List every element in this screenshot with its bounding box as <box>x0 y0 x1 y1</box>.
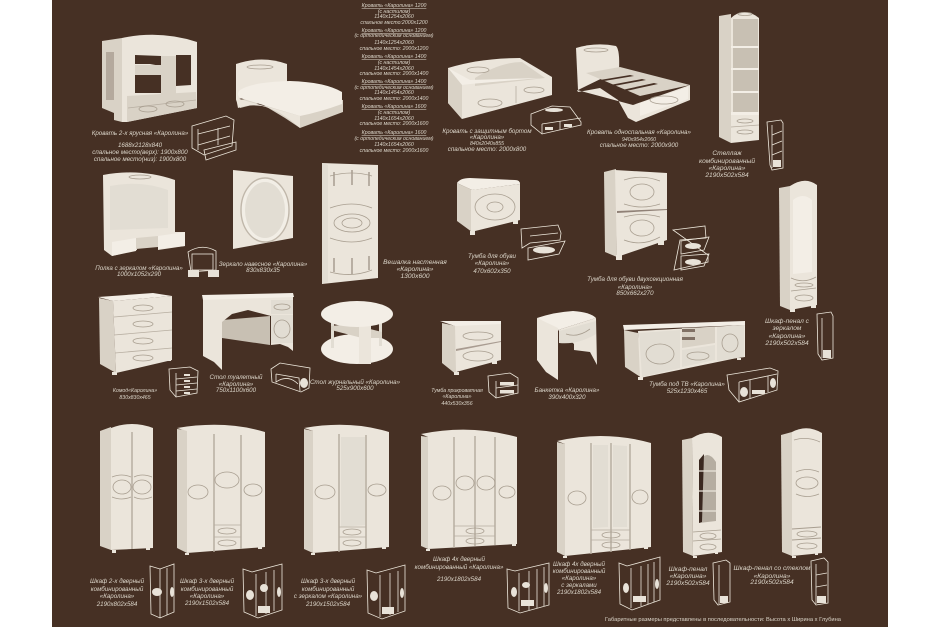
caption: TV cabinet: 525х1230х465 <box>667 388 708 395</box>
caption: bed sizes list: (с ортопедическим основанием) <box>354 136 434 142</box>
item: oval coffee table <box>321 301 393 364</box>
caption: dressing table: «Каролина» <box>219 381 254 388</box>
caption: shoe cabinet: «Каролина» <box>475 260 510 267</box>
caption: dressing table <box>210 374 263 394</box>
caption: bed sizes list: Кровать «Каролина» 1600 <box>362 104 426 110</box>
caption: bed sizes list: 1140х1454х2060 <box>374 90 414 96</box>
schematic: 3-door wardrobe with mirror <box>367 565 405 619</box>
caption: bunk bed: спальное место(низ): 1900х800 <box>94 156 187 163</box>
caption: bed sizes list: спальное место: 2000х1400 <box>360 71 428 77</box>
caption: TV cabinet <box>649 381 725 395</box>
item: TV cabinet <box>623 321 745 380</box>
caption: bed sizes list: спальное место:2000х1200 <box>360 20 428 26</box>
caption: bed sizes list: Кровать «Каролина» 1600 <box>362 130 426 136</box>
schematic: dressing table <box>271 363 310 392</box>
caption: bed sizes list: 1140х1654х2060 <box>374 142 414 148</box>
caption: bed sizes list: 1140х1254х2060 <box>374 40 414 46</box>
caption: tall wardrobe: 2190х502х584 <box>749 579 794 586</box>
item: single bed <box>576 44 690 122</box>
caption: bed sizes list: 1140х1454х2060 <box>374 66 414 72</box>
caption: 3-door wardrobe: Шкаф 3-х дверный <box>180 578 235 585</box>
item: 3-door wardrobe with mirror <box>304 425 389 555</box>
schematic: shelving unit <box>767 120 783 170</box>
caption: wardrobe with mirror <box>764 318 810 347</box>
item: shoe cabinet <box>457 178 520 235</box>
caption: sofa bed: 840х2040х855 <box>470 141 504 147</box>
caption: oval coffee table: Стол журнальный «Каролина» <box>310 379 401 386</box>
item: wall coat rack <box>322 163 378 284</box>
caption: single bed: 940х954х2060 <box>622 137 656 143</box>
caption: 4-door wardrobe with mirrors: Шкаф 4х дверный <box>553 561 606 568</box>
caption: round wall mirror: 830х830х35 <box>246 267 280 274</box>
caption: tall wardrobe <box>734 565 811 586</box>
caption: shelving unit: комбинированный <box>699 157 755 165</box>
schematic: sofa bed <box>531 106 581 134</box>
caption: glass display cabinet <box>665 566 710 587</box>
item: bunk bed <box>102 35 197 122</box>
schematic: bunk bed <box>192 116 236 160</box>
caption: 2-door wardrobe: 2190х802х584 <box>96 601 138 608</box>
caption: bed sizes list: 1140х1654х2060 <box>374 116 414 122</box>
item: wardrobe with mirror <box>779 181 817 312</box>
caption: chest of drawers <box>113 388 157 401</box>
caption: 2-door wardrobe: комбинированный <box>91 586 144 593</box>
item: double bed <box>236 60 343 128</box>
caption: 4-door wardrobe: Шкаф 4х дверный <box>433 556 486 563</box>
caption: bedside cabinet: «Каролина» <box>443 394 472 400</box>
caption: 3-door wardrobe: 2190х1502х584 <box>184 600 230 607</box>
caption: bunk bed: 1688х2128х840 <box>118 142 163 149</box>
caption: wardrobe with mirror: зеркалом <box>772 325 802 332</box>
schematic: glass display cabinet <box>713 560 730 605</box>
schematic: 3-door wardrobe <box>243 564 282 618</box>
caption: sofa bed: спальное место: 2000х800 <box>448 146 527 153</box>
item: sofa bed with guard <box>448 58 552 119</box>
caption: sofa bed: Кровать с защитным бортом <box>442 128 532 135</box>
caption: two-section shoe cabinet: 850х662х270 <box>616 290 654 297</box>
footnote: dimension order: Габаритные размеры представлены в последовательности: Высота х Ширина х Глубина <box>605 617 842 623</box>
caption: glass display cabinet: Шкаф-пенал <box>669 566 708 573</box>
caption: bunk bed: Кровать 2-х ярусная «Каролина» <box>92 130 189 137</box>
caption: 3-door wardrobe with mirror: Шкаф 3-х дверный <box>301 578 356 585</box>
item: tall wardrobe <box>781 428 822 558</box>
item: shelving unit <box>719 12 759 143</box>
caption: bed sizes list: (с настилом) <box>378 9 410 15</box>
caption: shoe cabinet <box>468 253 517 275</box>
schematic: chest of drawers <box>169 367 198 397</box>
schematic: 2-door wardrobe <box>150 564 174 618</box>
caption: bed sizes list: Кровать «Каролина» 1400 <box>362 79 426 85</box>
caption: dressing table: 750х1100х600 <box>216 387 257 394</box>
caption: bunk bed <box>92 130 189 163</box>
item: 4-door wardrobe with mirrors <box>557 436 651 558</box>
caption: 4-door wardrobe with mirrors: комбинированный <box>553 568 606 575</box>
caption: bed sizes list: Кровать «Каролина» 1200 <box>362 28 426 34</box>
schematic: 4-door wardrobe <box>507 563 549 613</box>
caption: bed sizes list: Кровать «Каролина» 1400 <box>362 54 426 60</box>
caption: shoe cabinet: 470х602х350 <box>473 268 511 275</box>
caption: 3-door wardrobe with mirror: 2190х1502х584 <box>305 601 351 608</box>
caption: bedside cabinet: Тумба прикроватная <box>431 388 483 394</box>
caption: wardrobe with mirror: «Каролина» <box>769 333 806 340</box>
caption: bed sizes list: Кровать «Каролина» 1200 <box>362 3 426 9</box>
caption: 3-door wardrobe <box>180 578 235 607</box>
item: dressing table <box>202 293 294 370</box>
caption: 3-door wardrobe: комбинированный <box>181 586 234 593</box>
caption: 4-door wardrobe: 2190х1802х584 <box>436 576 482 583</box>
caption: shoe cabinet: Тумба для обуви <box>468 253 517 260</box>
schematic: shelf with mirror <box>188 247 219 277</box>
caption: TV cabinet: Тумба под ТВ «Каролина» <box>649 381 725 388</box>
caption: shelf with mirror <box>95 265 183 278</box>
caption: tall wardrobe: «Каролина» <box>754 573 791 580</box>
item: two-section shoe cabinet <box>604 169 667 260</box>
caption: round wall mirror: Зеркало навесное «Каролина» <box>219 261 308 268</box>
caption: sofa bed <box>442 128 532 153</box>
caption: 3-door wardrobe: «Каролина» <box>190 593 225 600</box>
caption: 4-door wardrobe with mirrors: 2190х1802х584 <box>556 589 602 596</box>
caption: bed sizes list: 1140х1254х2060 <box>374 14 414 20</box>
caption: 4-door wardrobe with mirrors: «Каролина» <box>562 575 597 582</box>
schematic: shoe cabinet <box>521 225 565 260</box>
caption: bed sizes list: (с ортопедическим основанием) <box>354 33 434 39</box>
caption: bedside cabinet <box>431 388 483 407</box>
item: glass display cabinet <box>682 433 722 558</box>
item: round wall mirror <box>233 170 293 249</box>
caption: two-section shoe cabinet: «Каролина» <box>618 284 653 291</box>
caption: 4-door wardrobe with mirrors <box>553 561 606 596</box>
caption: bed sizes list <box>354 3 434 154</box>
item: shelf with mirror <box>103 172 185 256</box>
caption: bed sizes list: спальное место: 2000х1600 <box>360 148 428 154</box>
schematic: tall wardrobe <box>811 558 828 605</box>
caption: bed sizes list: спальное место: 2000х1600 <box>360 121 428 127</box>
caption: shelf with mirror: 1000х1052х290 <box>117 271 162 278</box>
caption: upholstered bench: 390х400х320 <box>548 394 586 401</box>
caption: oval coffee table <box>310 379 401 392</box>
caption: 4-door wardrobe: комбинированный «Каролина» <box>415 564 504 571</box>
caption: shelving unit: Стеллаж <box>712 150 742 157</box>
item: 4-door wardrobe <box>421 430 517 551</box>
caption: 4-door wardrobe with mirrors: с зеркалами <box>561 582 597 589</box>
item: 2-door wardrobe <box>100 424 153 553</box>
caption: shelving unit: 2190х502х584 <box>704 172 749 179</box>
caption: chest of drawers: Комод«Каролина» <box>113 388 157 394</box>
caption: bed sizes list: (с настилом) <box>378 60 410 66</box>
caption: wardrobe with mirror: Шкаф-пенал с <box>765 318 810 325</box>
schematic: 4-door wardrobe with mirrors <box>619 557 660 610</box>
caption: wardrobe with mirror: 2190х502х584 <box>764 340 809 347</box>
caption: wall coat rack: Вешалка настенная <box>383 259 447 266</box>
caption: two-section shoe cabinet: Тумба для обуви двухсекционная <box>587 276 684 283</box>
caption: shelving unit: «Каролина» <box>709 165 746 172</box>
caption: round wall mirror <box>219 261 308 274</box>
caption: 2-door wardrobe: Шкаф 2-х дверный <box>90 578 145 585</box>
caption: tall wardrobe: Шкаф-пенал со стеклом <box>734 565 811 572</box>
caption: 2-door wardrobe: «Каролина» <box>100 593 135 600</box>
caption: 2-door wardrobe <box>90 578 145 608</box>
caption: glass display cabinet: «Каролина» <box>670 573 707 580</box>
item: bedside cabinet <box>440 321 501 375</box>
caption: sofa bed: «Каролина» <box>470 134 505 141</box>
caption: 3-door wardrobe with mirror: комбинированный <box>302 586 355 593</box>
caption: bed sizes list: (с ортопедическим основанием) <box>354 85 434 91</box>
caption: two-section shoe cabinet <box>587 276 684 297</box>
schematic: two-section shoe cabinet <box>673 226 709 270</box>
caption: wall coat rack: «Каролина» <box>397 266 434 273</box>
caption: 3-door wardrobe with mirror: с зеркалом «Каролина» <box>294 593 363 600</box>
caption: bed sizes list: (с настилом) <box>378 110 410 116</box>
caption: shelving unit <box>699 150 755 179</box>
item: upholstered bench <box>537 311 597 380</box>
schematic: wardrobe with mirror <box>817 312 833 360</box>
caption: upholstered bench: Банкетка «Каролина» <box>535 387 600 394</box>
caption: bed sizes list: спальное место: 2000х1400 <box>360 96 428 102</box>
schematic: bedside cabinet <box>488 373 518 398</box>
caption: wall coat rack: 1300х600 <box>401 273 430 280</box>
caption: single bed: спальное место: 2000х900 <box>600 142 679 149</box>
caption: chest of drawers: 830х830х465 <box>119 395 151 401</box>
caption: bunk bed: спальное место(верх): 1900х800 <box>92 149 188 156</box>
caption: single bed <box>587 129 691 149</box>
caption: wall coat rack <box>383 259 447 280</box>
caption: bedside cabinet: 440х530х356 <box>441 401 473 407</box>
caption: glass display cabinet: 2190х502х584 <box>665 580 710 587</box>
caption: 4-door wardrobe <box>415 556 504 583</box>
caption: upholstered bench <box>535 387 600 401</box>
caption: bed sizes list: спальное место: 2000х1200 <box>360 46 428 52</box>
item: chest of drawers <box>98 293 172 375</box>
caption: 3-door wardrobe with mirror <box>294 578 363 608</box>
caption: dressing table: Стол туалетный <box>210 374 263 381</box>
caption: shelf with mirror: Полка с зеркалом «Каролина» <box>95 265 183 272</box>
caption: oval coffee table: 525х900х600 <box>336 385 374 392</box>
item: 3-door wardrobe <box>177 425 265 555</box>
caption: single bed: Кровать односпальная «Каролина» <box>587 129 691 136</box>
schematic: TV cabinet <box>727 368 778 402</box>
